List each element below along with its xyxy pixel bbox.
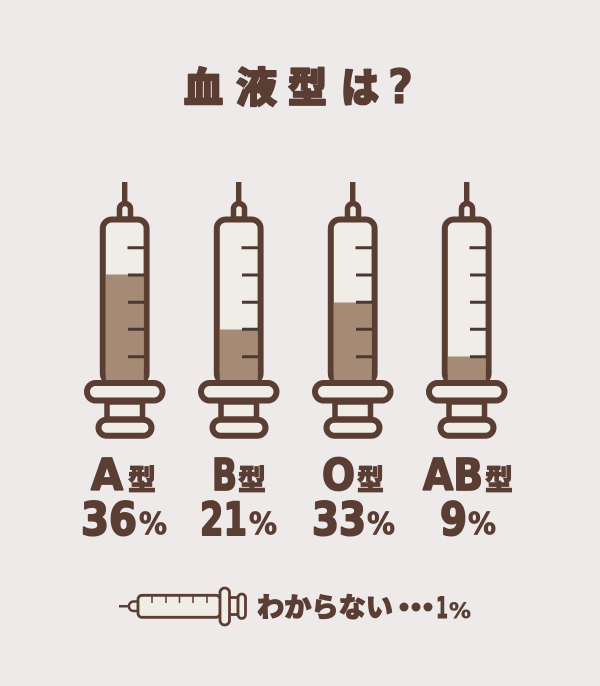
syringe: B type 21% [201, 182, 276, 436]
label: AB type 9%: AB [423, 450, 483, 501]
label: unknown 1%: わからない [257, 586, 393, 625]
label: B type 21%: B [212, 450, 237, 501]
label: unknown 1%: % [449, 599, 471, 623]
label: O type 33%: 33 [312, 493, 366, 546]
label: A type 36%: A [91, 450, 123, 501]
label: A type 36%: % [139, 507, 167, 542]
label: unknown 1% [257, 586, 471, 625]
title [184, 54, 413, 115]
title: 血 [184, 54, 223, 114]
label: O type 33%: O [322, 450, 355, 501]
label: A type 36%: 型 [128, 457, 156, 499]
label: B type 21%: 21 [200, 493, 247, 546]
title: 液 [236, 54, 277, 114]
label: B type 21% [200, 450, 277, 546]
label: AB type 9%: % [468, 507, 496, 542]
label: O type 33% [312, 450, 395, 546]
label: O type 33%: 型 [357, 457, 384, 499]
icon: horizontal syringe [119, 588, 246, 625]
label: B type 21%: 型 [238, 457, 266, 499]
title: は [341, 54, 379, 114]
title: 型 [288, 54, 327, 114]
label: A type 36%: 36 [81, 493, 137, 546]
label: AB type 9%: 型 [485, 457, 513, 499]
label: AB type 9% [423, 450, 513, 546]
label: AB type 9%: 9 [440, 493, 467, 546]
label: unknown 1%: 1 [436, 591, 448, 625]
label: A type 36% [81, 450, 167, 546]
syringe: O type 33% [315, 182, 390, 436]
title: ? [388, 60, 413, 115]
syringe: A type 36% [87, 182, 162, 436]
syringe: AB type 9% [429, 182, 504, 436]
label: O type 33%: % [367, 507, 395, 542]
label: B type 21%: % [249, 507, 277, 542]
